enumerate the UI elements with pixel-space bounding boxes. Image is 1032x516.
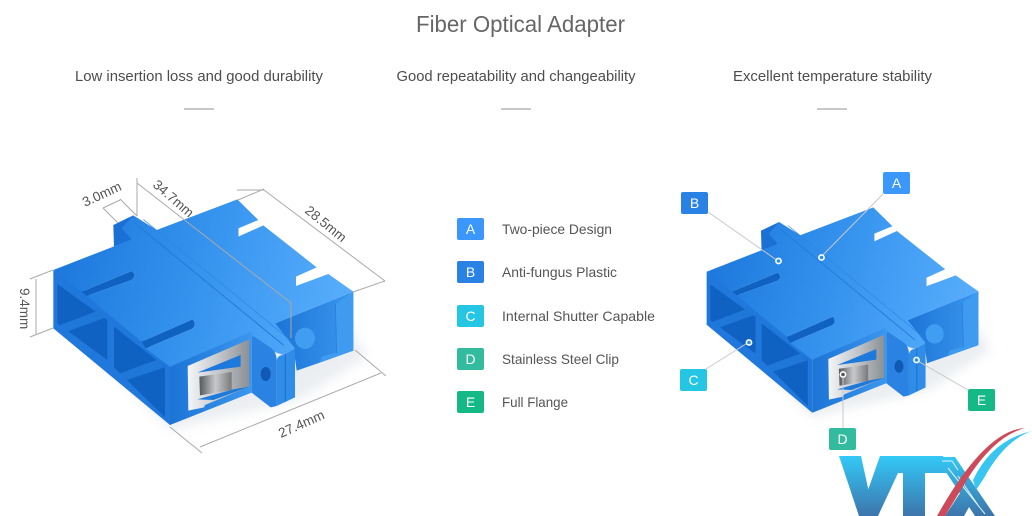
- dimension label: 3.0mm: 3.0mm: [80, 179, 124, 210]
- VTX logo: [839, 428, 1032, 516]
- legend item C: C: [465, 308, 476, 324]
- dimension label: 34.7mm: 34.7mm: [150, 177, 197, 220]
- callout adapter diagram: [680, 172, 995, 450]
- feature heading: good repeatability: Good repeatability and changeability: [396, 69, 636, 85]
- callout marker dots: [746, 255, 919, 377]
- title: Fiber Optical Adapter: [416, 11, 625, 37]
- callout badge C: [680, 369, 707, 391]
- adapter photo illustration: left: [53, 199, 367, 430]
- legend item B: [457, 261, 617, 283]
- legend: [457, 218, 655, 413]
- dimension label: 27.4mm: 27.4mm: [276, 407, 327, 441]
- callout badge C: C: [688, 372, 699, 388]
- legend item B: B: [466, 264, 475, 280]
- callout badge A: [883, 172, 910, 194]
- legend item B: Anti-fungus Plastic: [502, 265, 617, 280]
- callout badge D: [829, 428, 856, 450]
- legend item C: Internal Shutter Capable: [502, 309, 655, 324]
- callout badge E: E: [977, 392, 986, 408]
- callout badge B: B: [690, 195, 699, 211]
- callout badge D: D: [837, 431, 848, 447]
- legend item D: Stainless Steel Clip: [502, 352, 619, 367]
- feature heading: temperature stability: Excellent temperature stability: [733, 69, 933, 85]
- legend item E: Full Flange: [502, 395, 568, 410]
- dimension lines: [30, 178, 386, 453]
- legend item D: [457, 348, 619, 370]
- legend item A: Two-piece Design: [502, 222, 612, 237]
- dimension label: 9.4mm: 9.4mm: [17, 288, 32, 329]
- callout badge E: [968, 389, 995, 411]
- callout lines: [706, 194, 968, 428]
- callout badge A: A: [892, 175, 902, 191]
- legend item E: E: [466, 394, 475, 410]
- legend item A: A: [466, 221, 476, 237]
- legend item A: [457, 218, 612, 240]
- adapter photo illustration: right: [707, 207, 990, 417]
- dimension label: 28.5mm: 28.5mm: [302, 203, 349, 245]
- legend item C: [457, 305, 655, 327]
- callout badge B: [681, 192, 708, 214]
- feature heading: low insertion loss: Low insertion loss and good durability: [75, 69, 324, 85]
- dimensioned adapter diagram: [17, 177, 386, 453]
- legend item D: D: [465, 351, 476, 367]
- legend item E: [457, 391, 568, 413]
